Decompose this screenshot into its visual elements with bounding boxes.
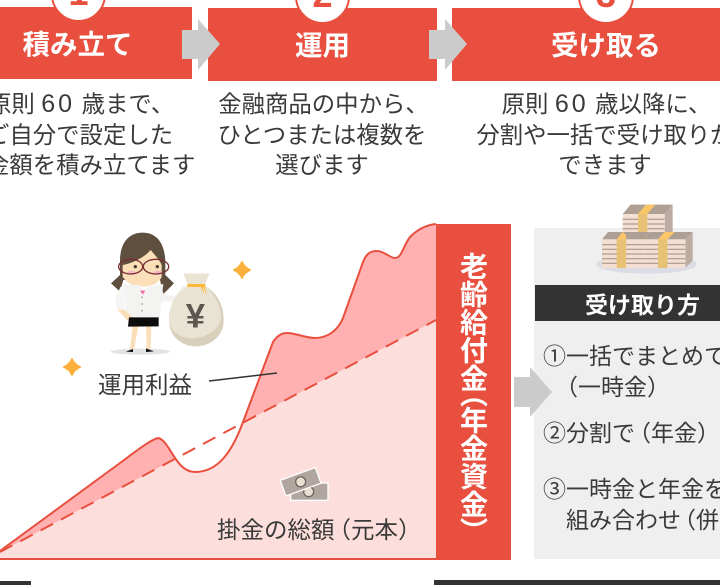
right arm	[159, 285, 188, 302]
leader line	[209, 373, 277, 381]
sparkle	[63, 358, 81, 376]
shoes	[126, 348, 154, 352]
bottom bar right	[434, 580, 720, 585]
step 3 text: 原則 60 歳以降に、	[502, 90, 711, 118]
skirt	[128, 317, 159, 327]
option 2: ②分割で（年金）	[543, 420, 720, 446]
blush	[128, 271, 136, 274]
arrow: to payout methods	[514, 367, 552, 417]
step 1 header: 積み立て	[22, 29, 132, 60]
icon: banknotes	[280, 467, 329, 501]
chart: total curve	[0, 224, 436, 551]
step 2 text: 金融商品の中から、	[218, 91, 429, 117]
step 2 header: 運用	[295, 30, 350, 61]
bottom bar left	[0, 581, 31, 585]
growth chart	[0, 223, 436, 560]
chart: baseline	[0, 558, 436, 560]
buttons	[141, 296, 143, 298]
yen sign: ¥	[186, 297, 206, 335]
panel heading bar	[535, 285, 720, 321]
label: investment gain: 運用利益	[98, 372, 192, 398]
panel heading bar: 受け取り方	[585, 292, 700, 318]
step 2 text	[218, 91, 429, 178]
step 3 circle	[578, 0, 634, 24]
hair	[111, 233, 174, 294]
option 1 note: （一時金）	[555, 374, 670, 400]
arrow: step 2 to 3	[429, 19, 467, 70]
step 3 header	[452, 8, 720, 81]
step 1 text	[0, 90, 195, 178]
step 3 text	[476, 90, 720, 178]
step 1 header	[0, 7, 192, 79]
chart: investment gain area	[0, 224, 436, 560]
step 3 text: できます	[558, 152, 652, 178]
step 2 circle	[295, 0, 350, 24]
arrow: step 1 to 2	[182, 19, 220, 70]
illustration: woman with money bag	[110, 232, 224, 354]
icon: money stacks	[596, 204, 696, 274]
chart: principal dashed line	[0, 320, 436, 552]
legs	[130, 325, 151, 349]
vertical band label: 老齢給付金（年金資金）	[457, 252, 488, 532]
glasses	[119, 259, 143, 274]
vertical band: retirement benefits	[436, 224, 511, 560]
step 1 circle	[51, 0, 106, 22]
blouse	[123, 283, 163, 319]
step 2 text: ひとつまたは複数を	[218, 122, 426, 148]
label: total contributions: 掛金の総額（元本）	[217, 517, 422, 543]
chart: principal area	[0, 320, 436, 560]
left arm	[115, 287, 132, 322]
step 3 header: 受け取る	[551, 30, 661, 61]
bag	[169, 274, 224, 346]
step 2 header	[208, 8, 437, 81]
face	[123, 250, 162, 287]
step 2 text: 選びます	[275, 152, 369, 178]
panel: how to receive	[534, 228, 720, 559]
sparkle	[233, 261, 251, 279]
